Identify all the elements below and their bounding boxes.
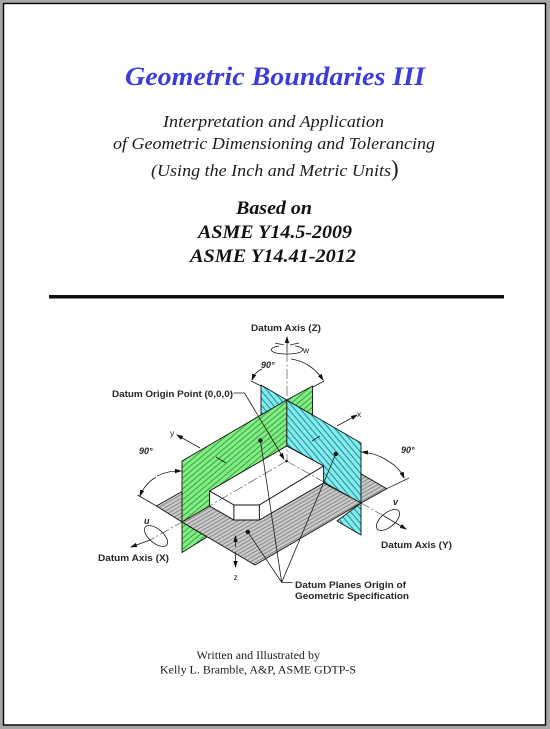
callout: datum planes origin leaders: Geometric Specification [295,591,409,601]
label: datum origin point with leader: Datum Origin Point (0,0,0) [112,389,233,399]
label: datum axis Y: Datum Axis (Y) [381,540,452,550]
subtitle: Interpretation and Application [162,112,384,131]
axis x and y arrows: x [357,409,362,419]
divider rule [49,295,504,298]
90 degree dimension left [138,446,181,506]
title: Geometric Boundaries III [125,62,426,91]
rotation v around Y axis [373,497,406,534]
90 degree dimension top: 90° [261,360,275,370]
author credit: Written and Illustrated by [196,648,320,662]
standards block [189,199,356,267]
subtitle: ) [391,156,399,181]
axis Z arrow with rotation w: w [302,345,310,355]
axis x and y arrows: y [170,428,175,438]
axis z arrow: z [234,572,238,582]
rotation v around Y axis: v [393,497,399,507]
axis Z arrow with rotation w [271,337,310,355]
subtitle [113,112,435,181]
label: datum axis Z: Datum Axis (Z) [251,323,321,333]
axis x and y arrows [170,409,362,463]
part: white chamfered block [210,446,324,520]
plane: green vertical datum plane [182,386,313,552]
subtitle: (Using the Inch and Metric Units [151,161,391,180]
90 degree dimension right: 90° [401,445,415,455]
author credit: Kelly L. Bramble, A&P, ASME GDTP-S [160,662,356,676]
standards block: ASME Y14.41-2012 [189,247,356,267]
author credit [160,648,356,676]
rotation u around X axis: u [144,516,150,526]
callout: datum planes origin leaders [246,438,409,601]
axis z arrow [234,536,238,582]
label: datum origin point with leader [112,389,288,462]
standards block: Based on [235,199,312,219]
rotation u around X axis [131,516,171,550]
plane: blue vertical datum plane [261,385,361,535]
subtitle: of Geometric Dimensioning and Tolerancing [113,134,435,153]
standards block: ASME Y14.5-2009 [197,223,352,243]
callout: datum planes origin leaders: Datum Planes Origin of [295,580,407,590]
diagram: datum reference frame [98,323,452,601]
axis center lines [150,352,384,540]
90 degree dimension right [362,445,415,489]
90 degree dimension top [251,359,324,387]
label: datum axis X: Datum Axis (X) [98,553,169,563]
90 degree dimension left: 90° [139,446,153,456]
plane: gray horizontal datum plane [156,474,387,565]
